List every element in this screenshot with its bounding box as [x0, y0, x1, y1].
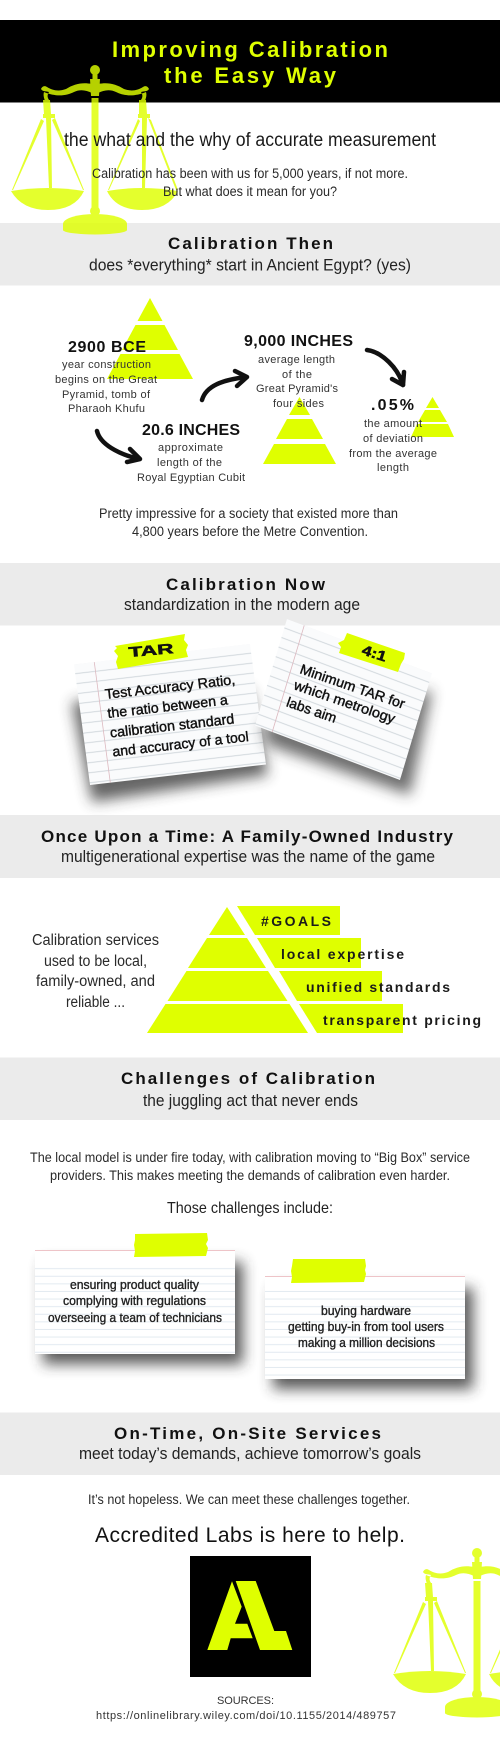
- logo: accredited labs: [190, 1556, 311, 1677]
- stat: 9,000 inches: Great Pyramid's: [256, 383, 338, 395]
- stat: 9,000 inches: average length: [258, 354, 335, 366]
- stat: 2900 BCE: year construction: [62, 359, 151, 371]
- note text: TAR: [104, 671, 249, 759]
- band: challenges: [0, 1058, 500, 1120]
- tape: 4:1: [338, 633, 405, 672]
- goals list: #GOALS: [261, 913, 331, 929]
- intro text: But what does it mean for you?: [163, 184, 337, 199]
- text: calibration services: [32, 932, 159, 1011]
- closing text: then: 4,800 years before the Metre Convention.: [132, 524, 368, 539]
- icon: balance scale top: [11, 65, 178, 234]
- text: calibration services: family-owned, and: [36, 973, 155, 990]
- note: 4:1: [255, 619, 432, 795]
- tape: left: [134, 1233, 208, 1257]
- stat: .05%: of deviation: [363, 433, 423, 445]
- sources: SOURCES:: [217, 1695, 274, 1707]
- stat: 20.6 inches: approximate: [158, 442, 223, 454]
- tape: right: [291, 1259, 366, 1283]
- note text: TAR: the ratio between a: [107, 691, 229, 721]
- heading: calibration then: does *everything* start in Ancient Egypt? (yes): [89, 256, 411, 274]
- icon: pyramid small: [411, 397, 454, 437]
- note text: 4:1: which metrology: [291, 676, 397, 726]
- tape label: 4:1: 4:1: [360, 642, 389, 665]
- icon: pyramid large: [107, 298, 193, 379]
- card text: right: buying hardware: [321, 1304, 411, 1318]
- arrow: to 9,000 inches: [202, 371, 247, 400]
- stat: .05%: [349, 397, 437, 474]
- stat: .05%: length: [377, 462, 409, 474]
- icon: pyramid middle: [263, 397, 336, 464]
- stat: 20.6 inches: 20.6 INCHES: [142, 422, 240, 439]
- card: challenges right: [265, 1259, 473, 1389]
- goals list: transparent pricing: [323, 1012, 481, 1028]
- text: local model: The local model is under fire today, with calibration moving to “Big Box” service: [30, 1150, 470, 1165]
- heading: once upon a time: multigenerational expertise was the name of the game: [61, 848, 435, 866]
- stat: 2900 BCE: [55, 339, 157, 415]
- band: calibration now: [0, 563, 500, 626]
- text: calibration services: used to be local,: [44, 953, 147, 970]
- title: [112, 37, 388, 88]
- note text: 4:1: labs aim: [285, 694, 339, 726]
- title: the Easy Way: [164, 63, 337, 88]
- sources: https://onlinelibrary.wiley.com/doi/10.1155/2014/489757: [96, 1710, 396, 1722]
- intro text: [92, 166, 408, 199]
- stat: 9,000 inches: of the: [282, 369, 312, 381]
- card text: right: getting buy-in from tool users: [288, 1320, 444, 1334]
- heading: calibration now: standardization in the modern age: [124, 596, 360, 614]
- stat: 20.6 inches: [137, 422, 245, 484]
- header band: [0, 20, 500, 102]
- heading: challenges: Challenges of Calibration: [121, 1069, 375, 1088]
- goals list: local expertise: [281, 946, 404, 962]
- heading: on-time services: [79, 1424, 421, 1463]
- heading: on-time services: meet today’s demands, achieve tomorrow’s goals: [79, 1445, 421, 1463]
- arrow: to 20.6 inches: [97, 431, 140, 462]
- heading: calibration then: [89, 234, 411, 274]
- subtitle: the what and the why of accurate measurement: [64, 130, 437, 151]
- stat: 20.6 inches: length of the: [157, 457, 222, 469]
- stat: 2900 BCE: 2900 BCE: [68, 339, 146, 356]
- stat: 20.6 inches: Royal Egyptian Cubit: [137, 472, 245, 484]
- stat: .05%: from the average: [349, 448, 437, 460]
- heading: calibration now: [124, 575, 360, 614]
- stat: 9,000 inches: 9,000 INCHES: [244, 333, 353, 350]
- stat: 9,000 inches: [244, 333, 353, 410]
- note text: 4:1: [285, 661, 408, 726]
- text: local model: providers. This makes meeting the demands of calibration even harder.: [50, 1168, 450, 1183]
- icon: balance scale bottom: [393, 1548, 500, 1718]
- tape label: TAR: TAR: [128, 640, 174, 660]
- title: Improving Calibration: [112, 37, 388, 62]
- heading: calibration then: Calibration Then: [168, 234, 333, 253]
- heading: calibration now: Calibration Now: [166, 575, 326, 594]
- heading: once upon a time: Once Upon a Time: A Family-Owned Industry: [41, 827, 454, 846]
- stat: 2900 BCE: Pyramid, tomb of: [62, 389, 151, 401]
- card text: left: complying with regulations: [63, 1294, 206, 1308]
- heading: challenges: the juggling act that never ends: [143, 1092, 358, 1110]
- text: those challenges: Those challenges include:: [167, 1200, 333, 1217]
- text: calibration services: reliable ...: [66, 994, 125, 1011]
- card text: right: [288, 1304, 444, 1350]
- closing text: then: Pretty impressive for a society that existed more than: [99, 506, 398, 521]
- note text: 4:1: Minimum TAR for: [298, 661, 408, 712]
- text: accredited labs: Accredited Labs is here to help.: [95, 1524, 405, 1547]
- heading: on-time services: On-Time, On-Site Services: [114, 1424, 381, 1443]
- note text: TAR: calibration standard: [109, 710, 235, 740]
- card text: left: [48, 1278, 222, 1325]
- arrow: to .05%: [367, 350, 404, 385]
- card text: right: making a million decisions: [298, 1336, 435, 1350]
- intro text: Calibration has been with us for 5,000 years, if not more.: [92, 166, 408, 181]
- closing text: then: [99, 506, 398, 539]
- heading: challenges: [121, 1069, 375, 1110]
- card text: left: ensuring product quality: [70, 1278, 200, 1292]
- card: challenges left: [35, 1233, 243, 1364]
- note: TAR: [72, 634, 268, 802]
- stat: .05%: the amount: [364, 418, 422, 430]
- text: calibration services: Calibration services: [32, 932, 159, 949]
- stat: 2900 BCE: begins on the Great: [55, 374, 157, 386]
- band: once upon a time: [0, 815, 500, 878]
- tape: TAR: [114, 634, 188, 669]
- text: not hopeless: It’s not hopeless. We can meet these challenges together.: [88, 1492, 410, 1507]
- goals list: unified standards: [306, 979, 450, 995]
- band: on-time services: [0, 1412, 500, 1475]
- stat: .05%: .05%: [371, 397, 414, 414]
- note text: TAR: Test Accuracy Ratio,: [104, 671, 236, 702]
- stat: 9,000 inches: four sides: [273, 398, 324, 410]
- card text: left: overseeing a team of technicians: [48, 1311, 222, 1325]
- stat: 2900 BCE: Pharaoh Khufu: [68, 403, 145, 415]
- chart: goals pyramid: [147, 906, 403, 1033]
- sources: [96, 1695, 396, 1722]
- note text: TAR: and accuracy of a tool: [112, 728, 249, 759]
- goals list: [261, 913, 481, 1028]
- band: calibration then: [0, 223, 500, 286]
- text: local model: [30, 1150, 470, 1183]
- heading: once upon a time: [41, 827, 454, 866]
